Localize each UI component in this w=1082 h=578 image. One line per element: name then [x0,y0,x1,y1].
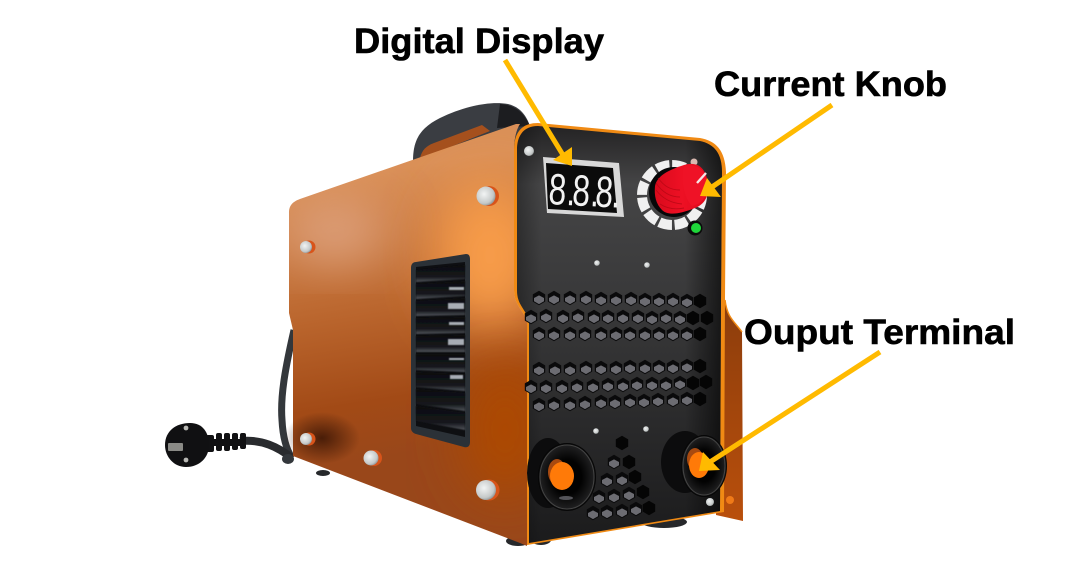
digital display [543,157,624,218]
bottom centre ventilation holes [587,436,655,520]
upper ventilation holes [525,291,713,341]
dial scale ring [642,165,702,225]
infographic: welding machine with labelled parts [165,27,1013,546]
plug body [165,423,209,467]
green indicator LED [688,220,702,236]
flange glow spot [726,496,734,504]
side ventilation grille [411,254,470,447]
lower ventilation holes [525,359,712,412]
panel: right flange [715,290,743,521]
current knob [642,158,708,225]
arrow: digital display [505,60,572,166]
label: digital display: Digital Display [354,22,605,61]
panel: orange side [284,124,550,546]
arrow: current knob [700,105,832,197]
right output terminal [661,431,727,497]
strain relief [204,433,246,452]
power cable and plug [165,330,294,467]
front panel small screws [524,146,714,506]
cable to plug [240,441,292,458]
left output terminal [527,438,596,511]
panel: front face [514,123,726,545]
label: current knob: Current Knob [714,65,947,104]
red knob [655,164,708,214]
label: output terminal: Ouput Terminal [744,313,1015,352]
arrow: output terminal [699,352,880,471]
handle [413,103,530,161]
display digits: 8.8.8. [547,165,622,218]
side screws [300,186,500,500]
feet [316,470,687,546]
cable loop [282,330,294,458]
